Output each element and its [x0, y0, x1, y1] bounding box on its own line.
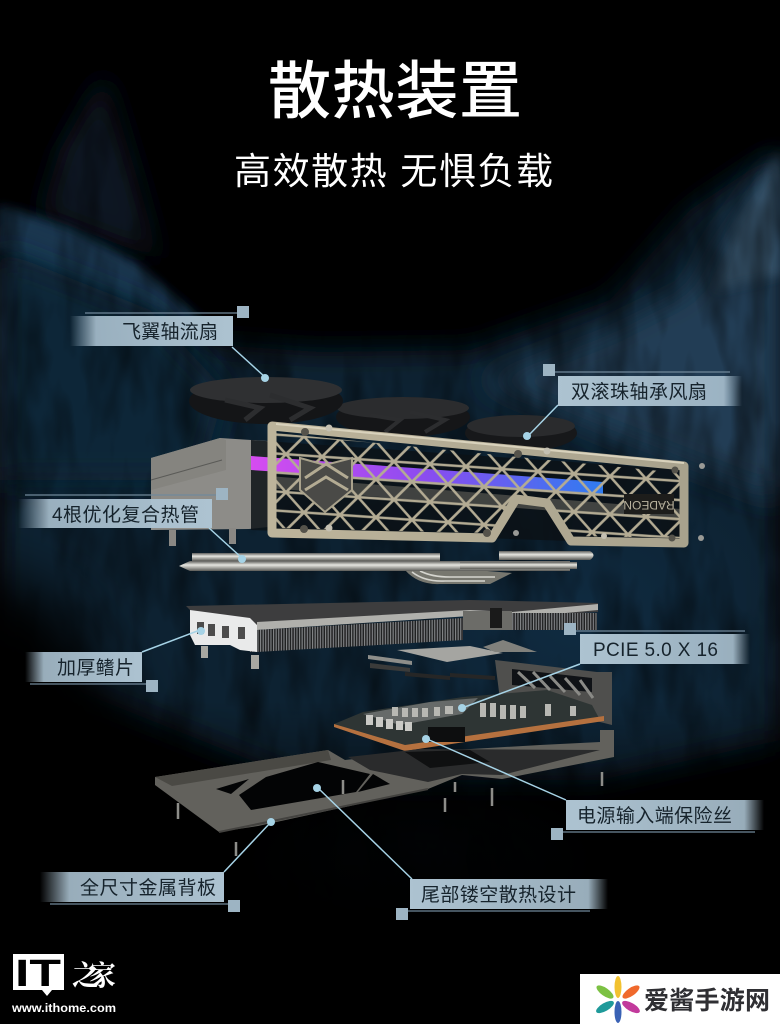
logo: ITHome: 之家	[72, 954, 116, 994]
logo: watermark: 爱酱手游网	[644, 987, 770, 1015]
title: 散热装置	[268, 57, 522, 127]
logo: ITHome: IT	[15, 953, 61, 995]
callout: backplate	[40, 818, 275, 912]
io bracket	[495, 660, 612, 725]
icon: flower	[594, 976, 642, 1023]
exploded graphics card	[151, 377, 705, 856]
callout: power fuse	[422, 735, 764, 840]
callout: fan: 飞翼轴流扇	[122, 321, 218, 343]
callout: heat pipes	[18, 488, 246, 563]
loose screws	[513, 463, 705, 541]
thermal plates	[368, 640, 537, 680]
heat pipes	[179, 551, 594, 584]
circuit board	[334, 690, 604, 751]
callout: fins: 加厚鳍片	[57, 657, 134, 679]
light box	[151, 438, 268, 546]
fin stack	[186, 600, 598, 669]
callout: heat pipes: 4根优化复合热管	[52, 504, 199, 526]
fans	[189, 377, 577, 451]
callout: PCIE	[458, 623, 750, 712]
logo: watermark	[580, 974, 780, 1024]
callout: fins	[25, 627, 205, 692]
callout: power fuse: 电源输入端保险丝	[577, 805, 732, 827]
subtitle: 高效散热 无惧负载	[234, 151, 553, 192]
lattice front panel	[268, 420, 688, 548]
callout: cutout: 尾部镂空散热设计	[421, 884, 576, 906]
dark interior and light bar	[251, 440, 688, 545]
callout: PCIE: PCIE 5.0 X 16	[593, 640, 718, 661]
metal backplate	[155, 730, 614, 856]
callout: ball bearing fan	[523, 364, 742, 440]
logo: ITHome	[11, 953, 116, 1015]
callout: backplate: 全尺寸金属背板	[80, 877, 216, 899]
callout: fan	[70, 306, 269, 382]
callout: ball bearing fan: 双滚珠轴承风扇	[571, 381, 707, 403]
lattice front panel: RADEON	[623, 498, 675, 512]
callout: cutout	[313, 784, 608, 920]
logo: ITHome: www.ithome.com	[11, 1001, 116, 1015]
